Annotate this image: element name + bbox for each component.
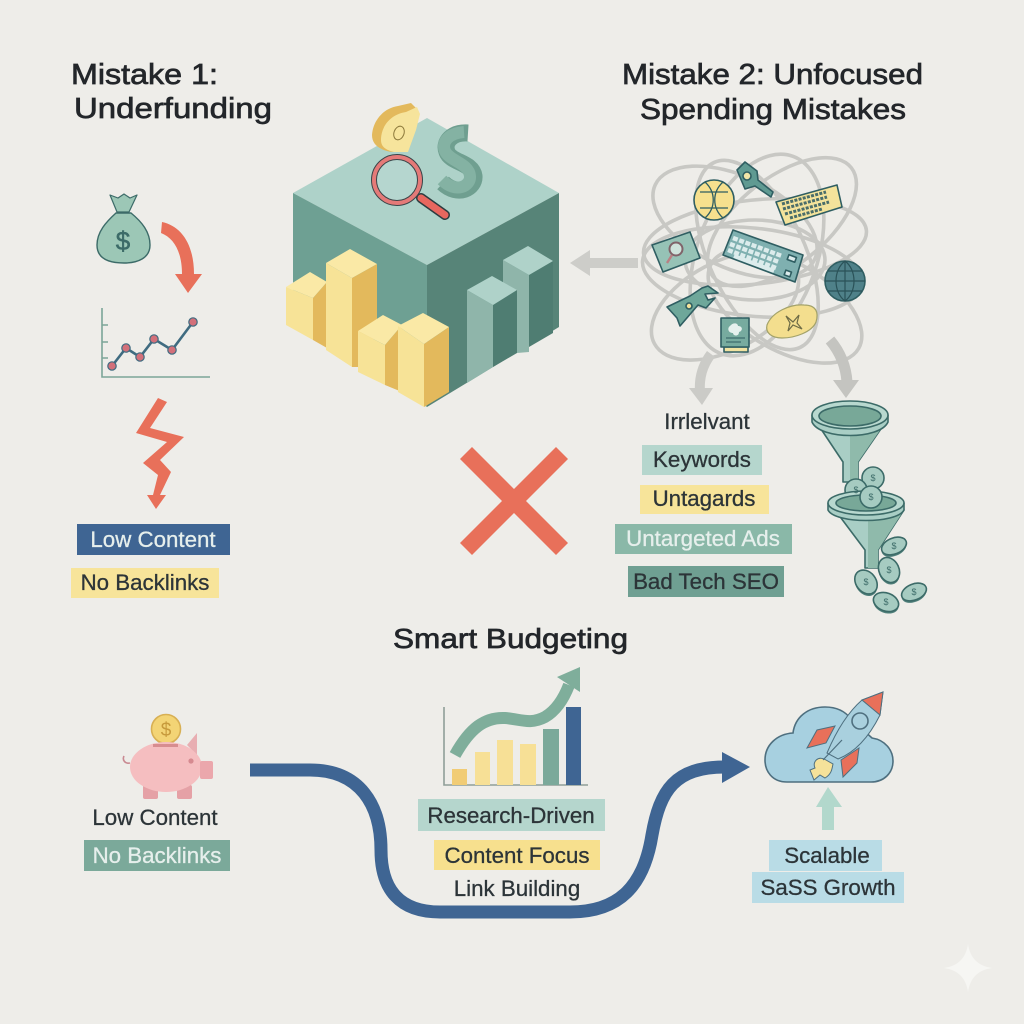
falling coins: $	[853, 485, 859, 495]
icon: red cross	[460, 447, 568, 555]
icon: magnifying glass	[372, 154, 445, 215]
title: mistake 1: Underfunding	[74, 93, 272, 125]
icon: yellow globe	[694, 180, 734, 220]
falling coins: $	[886, 565, 892, 575]
label: saas growth: SaSS Growth	[760, 875, 896, 900]
arrow: blue flow path	[250, 752, 750, 912]
icon: rocket and cloud	[765, 692, 893, 782]
icon: sparkle	[944, 944, 992, 992]
label: content focus: Content Focus	[444, 843, 590, 868]
label: low content	[77, 524, 230, 555]
title: mistake 1	[71, 59, 272, 125]
falling coins: $	[911, 587, 917, 597]
text: low content: Low Content	[92, 805, 218, 830]
icon: funnels and coins	[812, 401, 929, 617]
list: irrelevant items	[615, 409, 792, 597]
icon: plug wrench	[737, 162, 773, 197]
label: no backlinks: No Backlinks	[81, 570, 209, 595]
label: keywords: Keywords	[653, 447, 751, 472]
icon: teal dollar sign	[442, 132, 474, 190]
cloud	[765, 707, 893, 782]
falling coins: $	[891, 541, 897, 551]
rocket	[807, 692, 883, 780]
falling coins: $	[883, 597, 889, 607]
icon: piggy bank: $	[161, 720, 172, 741]
arrow: grey curve to funnel	[830, 340, 859, 398]
label: research-driven	[418, 799, 605, 831]
teal bars	[467, 246, 553, 383]
top coins	[845, 467, 884, 501]
icon: central keyboard	[723, 230, 803, 282]
icon: card with magnifier	[652, 232, 700, 272]
yellow bars	[286, 249, 449, 407]
icon: yellow blob with plane	[767, 305, 817, 338]
falling coins	[850, 473, 929, 617]
label: untargeted ads: Untargeted Ads	[626, 526, 780, 551]
label: bad tech seo: Bad Tech SEO	[633, 569, 779, 594]
arrow: red curved down	[161, 222, 202, 293]
tangled lines	[634, 133, 881, 387]
arrow: light teal up	[816, 787, 842, 830]
falling coins: $	[868, 492, 874, 502]
icon: teal globe	[825, 261, 865, 301]
tangle of unfocused spending	[634, 133, 881, 387]
arrow: grey left	[570, 250, 638, 276]
heading: smart budgeting: Smart Budgeting	[393, 623, 628, 654]
text: link building: Link Building	[454, 876, 580, 901]
icon: lower wrench	[667, 286, 718, 326]
lower funnel	[828, 491, 904, 568]
label: research-driven: Research-Driven	[427, 803, 595, 828]
icon: money bag	[97, 194, 150, 263]
label: low content: Low Content	[90, 527, 216, 552]
chart: small line chart	[102, 308, 210, 377]
chart: growth bars with arrow	[444, 667, 588, 785]
label: untagards: Untagards	[653, 486, 755, 511]
label: keywords	[642, 445, 762, 475]
icon: red lightning arrow	[136, 398, 184, 509]
arrow: grey curve to irrelevant list	[689, 354, 713, 405]
title: mistake 2: Mistake 2: Unfocused	[622, 59, 923, 91]
title: mistake 2: Spending Mistakes	[640, 94, 906, 126]
isometric cube with bars	[286, 103, 559, 407]
icon: piggy bank	[123, 714, 213, 799]
icon: yellow coin shape	[372, 103, 420, 152]
text: irrelevant: Irrlelvant	[664, 409, 751, 434]
falling coins: $	[863, 577, 869, 587]
falling coins: $	[870, 473, 876, 483]
label: no backlinks teal: No Backlinks	[93, 843, 221, 868]
label: untagards	[640, 485, 769, 514]
label: scalable	[769, 840, 882, 871]
icon: book	[721, 318, 749, 352]
icon: money bag: $	[116, 226, 131, 256]
title: mistake 1: Mistake 1:	[71, 59, 218, 91]
icon: yellow keyboard	[776, 185, 842, 225]
title: mistake 2	[622, 59, 923, 126]
label: scalable: Scalable	[784, 843, 870, 868]
top funnel	[812, 401, 888, 482]
